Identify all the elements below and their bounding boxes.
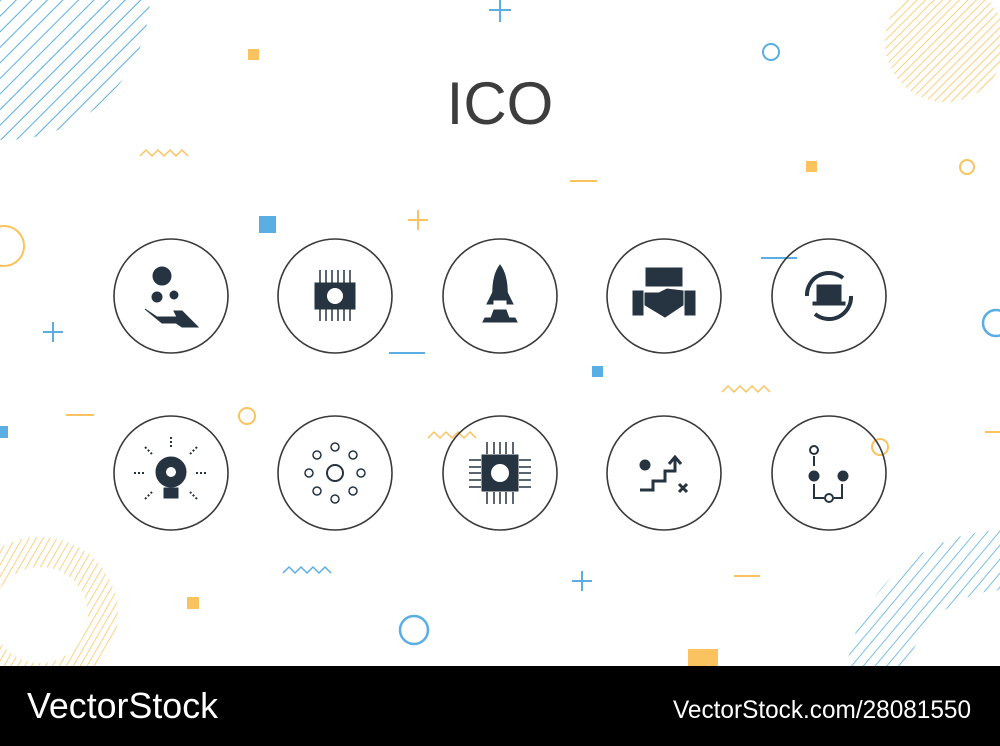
footer bar: VectorStock.com/28081550 <box>673 696 971 724</box>
icon: stairs path <box>640 457 687 492</box>
footer bar <box>0 666 1000 746</box>
icon: flow nodes <box>809 446 848 502</box>
icon: idea gear <box>134 437 208 499</box>
icon: bitcoin chip <box>315 270 355 321</box>
icon: laptop cycle <box>807 273 851 319</box>
icon: gear chip <box>469 442 531 504</box>
icon: dollar network <box>305 443 365 503</box>
title: ICO <box>447 70 553 137</box>
footer bar: VectorStock <box>27 685 219 726</box>
icon grid <box>114 239 886 530</box>
icon: handshake money <box>633 268 695 317</box>
icon: hand with coins <box>145 267 198 327</box>
icon: rocket <box>483 265 517 322</box>
